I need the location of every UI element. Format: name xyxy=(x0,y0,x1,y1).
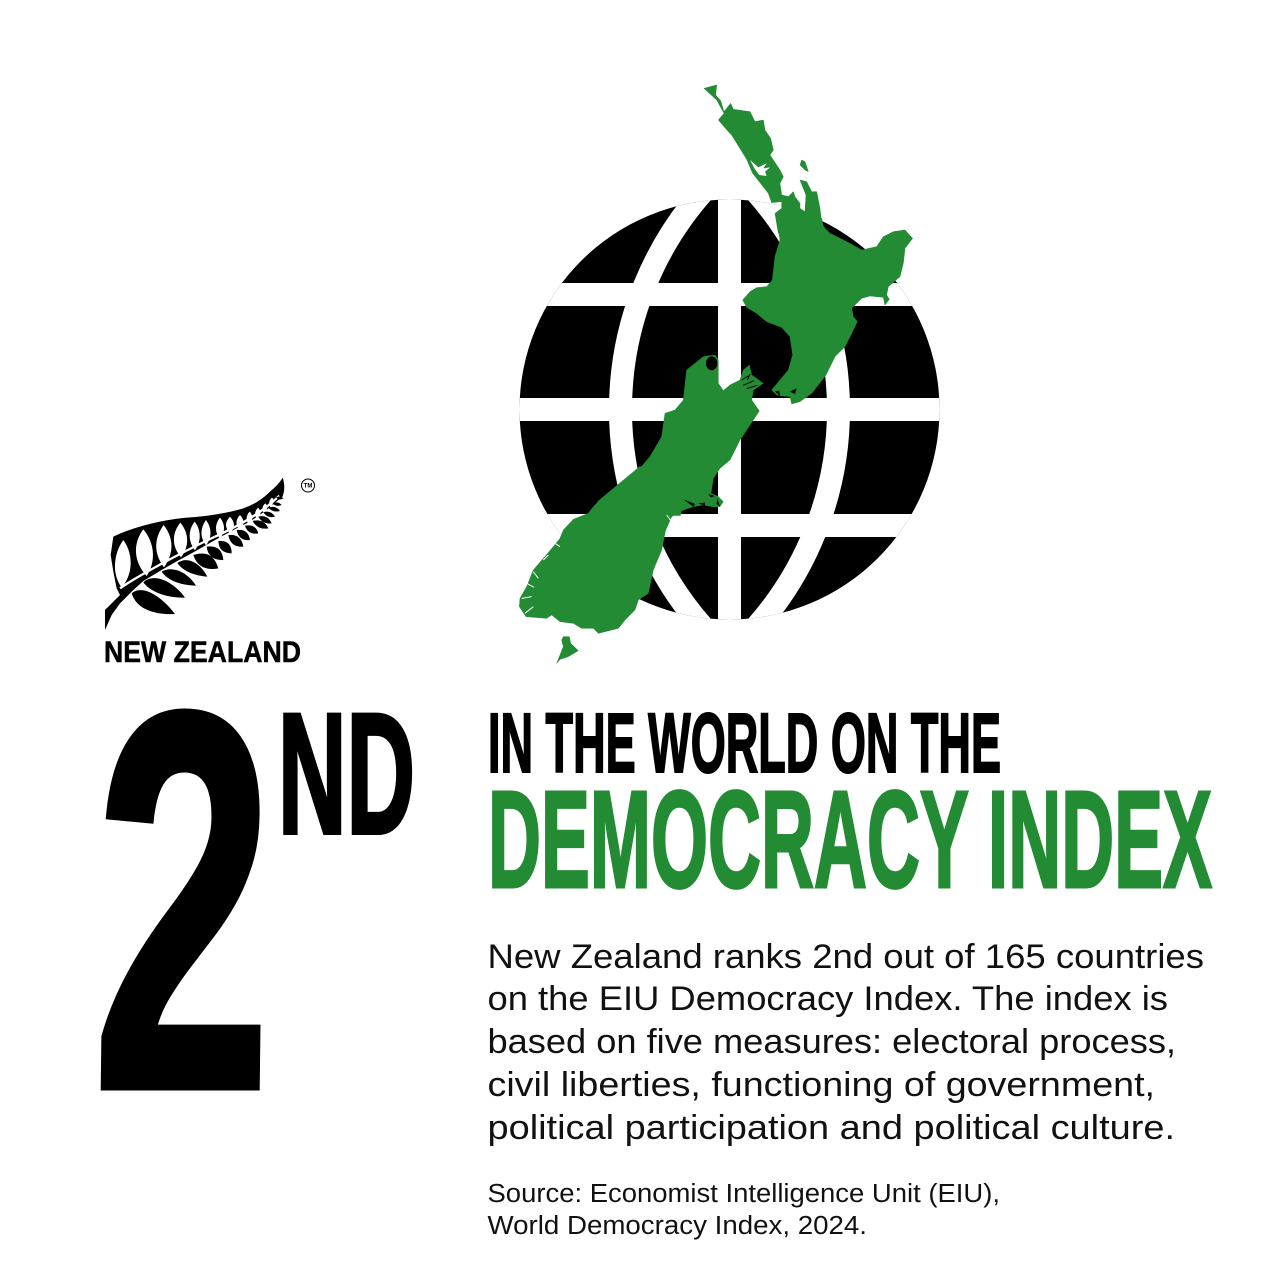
body paragraph: on the EIU Democracy Index. The index is xyxy=(488,980,1168,1018)
trademark symbol: TM xyxy=(304,484,312,490)
source note: Source: Economist Intelligence Unit (EIU), xyxy=(488,1180,1000,1208)
logo wordmark: NEW ZEALAND xyxy=(104,636,301,669)
South Island bottom xyxy=(519,500,680,663)
South Island middle xyxy=(598,467,682,515)
North Island body xyxy=(743,218,913,404)
icon: silver fern logo xyxy=(105,478,284,630)
Stewart Island xyxy=(557,637,578,663)
Northland xyxy=(704,85,828,233)
icon: map of New Zealand xyxy=(519,85,913,663)
body paragraph: civil liberties, functioning of government, xyxy=(488,1066,1155,1104)
source note xyxy=(488,1180,1000,1240)
body paragraph: political participation and political culture. xyxy=(488,1109,1175,1147)
body paragraph xyxy=(488,938,1204,1147)
South Island top xyxy=(640,355,763,532)
big ordinal number: 2 xyxy=(90,601,277,1203)
body paragraph: based on five measures: electoral process, xyxy=(488,1023,1176,1061)
body paragraph: New Zealand ranks 2nd out of 165 countries xyxy=(488,938,1204,976)
icon: globe xyxy=(520,200,940,620)
white midrib xyxy=(120,496,279,588)
ordinal suffix: ND xyxy=(278,678,415,870)
trademark symbol xyxy=(302,479,314,492)
source note: World Democracy Index, 2024. xyxy=(488,1212,867,1240)
